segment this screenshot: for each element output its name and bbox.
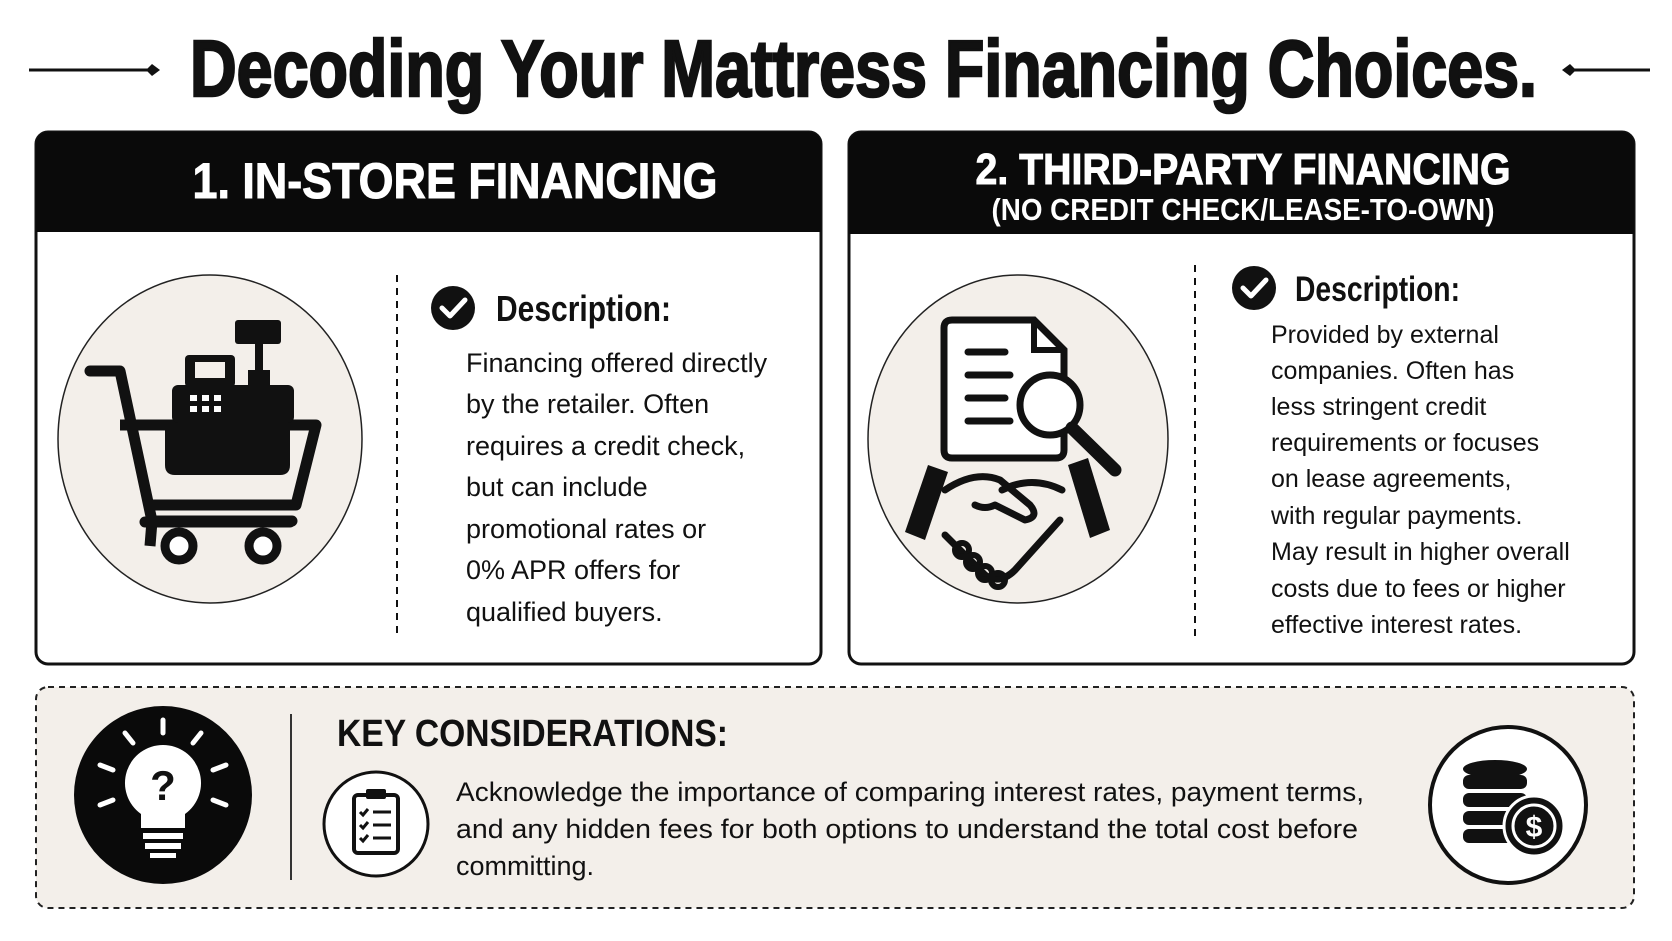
text block: in-store description: but can include: [466, 472, 648, 502]
heading: description: Description:: [496, 288, 671, 329]
text block: key considerations: and any hidden fees for both options to understand the total cost before: [456, 814, 1358, 844]
text block: in-store description: [466, 348, 768, 627]
header: third-party: [849, 132, 1634, 234]
header: third-party: 2. THIRD-PARTY FINANCING: [976, 145, 1510, 194]
icon: coins with dollar: [1430, 727, 1586, 883]
text block: key considerations: [456, 777, 1364, 881]
icon: document, magnifier and handshake: [868, 275, 1168, 603]
text block: third-party description: requirements or focuses: [1271, 429, 1539, 457]
text block: in-store description: requires a credit check,: [466, 431, 745, 461]
icon: lightbulb with question mark: [74, 706, 252, 884]
icon: coins with dollar: $: [1526, 811, 1543, 844]
text block: third-party description: with regular payments.: [1270, 502, 1523, 530]
text block: in-store description: by the retailer. Often: [466, 389, 709, 419]
text block: in-store description: qualified buyers.: [466, 597, 663, 627]
text block: third-party description: Provided by external: [1271, 321, 1499, 349]
panel: third-party financing: [849, 132, 1634, 664]
text block: in-store description: Financing offered directly: [466, 348, 768, 378]
panel: in-store financing: [36, 132, 821, 664]
panel: key considerations: [36, 687, 1634, 908]
header: in-store: [36, 132, 821, 232]
heading: description: Description:: [1295, 270, 1460, 309]
text block: third-party description: less stringent credit: [1271, 393, 1486, 421]
icon: clipboard: [324, 772, 428, 876]
icon: check: [431, 286, 475, 330]
icon: lightbulb with question mark: ?: [150, 762, 176, 809]
text block: third-party description: effective interest rates.: [1271, 611, 1522, 639]
text block: third-party description: companies. Often has: [1271, 357, 1514, 385]
header: in-store: 1. IN-STORE FINANCING: [192, 153, 718, 209]
text block: in-store description: promotional rates or: [466, 514, 706, 544]
text block: third-party description: May result in higher overall: [1271, 538, 1570, 566]
header: third-party: (NO CREDIT CHECK/LEASE-TO-OWN): [992, 192, 1494, 227]
heading: key considerations: KEY CONSIDERATIONS:: [337, 713, 728, 755]
text block: third-party description: on lease agreements,: [1271, 465, 1511, 493]
icon: check: [1232, 266, 1276, 310]
icon: shopping cart with register: [58, 275, 362, 603]
text block: key considerations: committing.: [456, 851, 594, 881]
text block: in-store description: 0% APR offers for: [466, 555, 680, 585]
text block: third-party description: costs due to fees or higher: [1271, 575, 1566, 603]
text block: key considerations: Acknowledge the importance of comparing interest rates, payment terms,: [456, 777, 1364, 807]
text block: third-party description: [1270, 321, 1570, 639]
